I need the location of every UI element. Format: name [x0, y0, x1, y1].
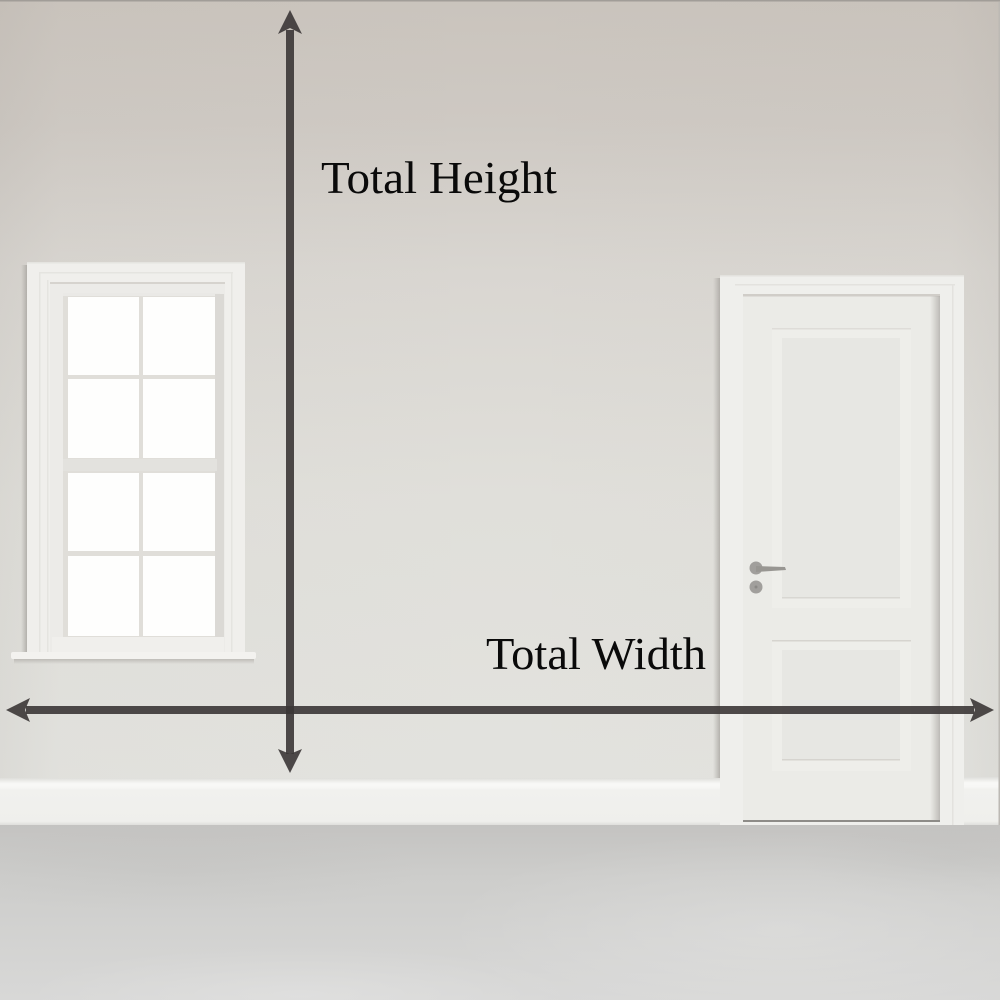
window sill [11, 652, 256, 659]
window bottom rail [52, 637, 224, 652]
lower panel [772, 640, 911, 771]
door casing [720, 275, 964, 825]
window shadows [21, 265, 27, 653]
window [11, 262, 256, 664]
floor [0, 824, 1000, 1000]
right wall edge [998, 2, 1000, 825]
meeting rail [63, 459, 217, 471]
door shadow [713, 278, 720, 778]
window casing [27, 262, 245, 654]
upper panel [772, 328, 911, 608]
arrow: total width [6, 698, 994, 722]
label: total height: Total Height [321, 152, 557, 203]
door [713, 2, 1000, 825]
window sash [63, 293, 220, 638]
label: total width: Total Width [486, 628, 706, 679]
door leaf [743, 296, 937, 820]
arrow: total height [278, 10, 302, 773]
skirting board [0, 777, 1000, 825]
door handle [750, 562, 786, 594]
window panes [68, 297, 215, 636]
